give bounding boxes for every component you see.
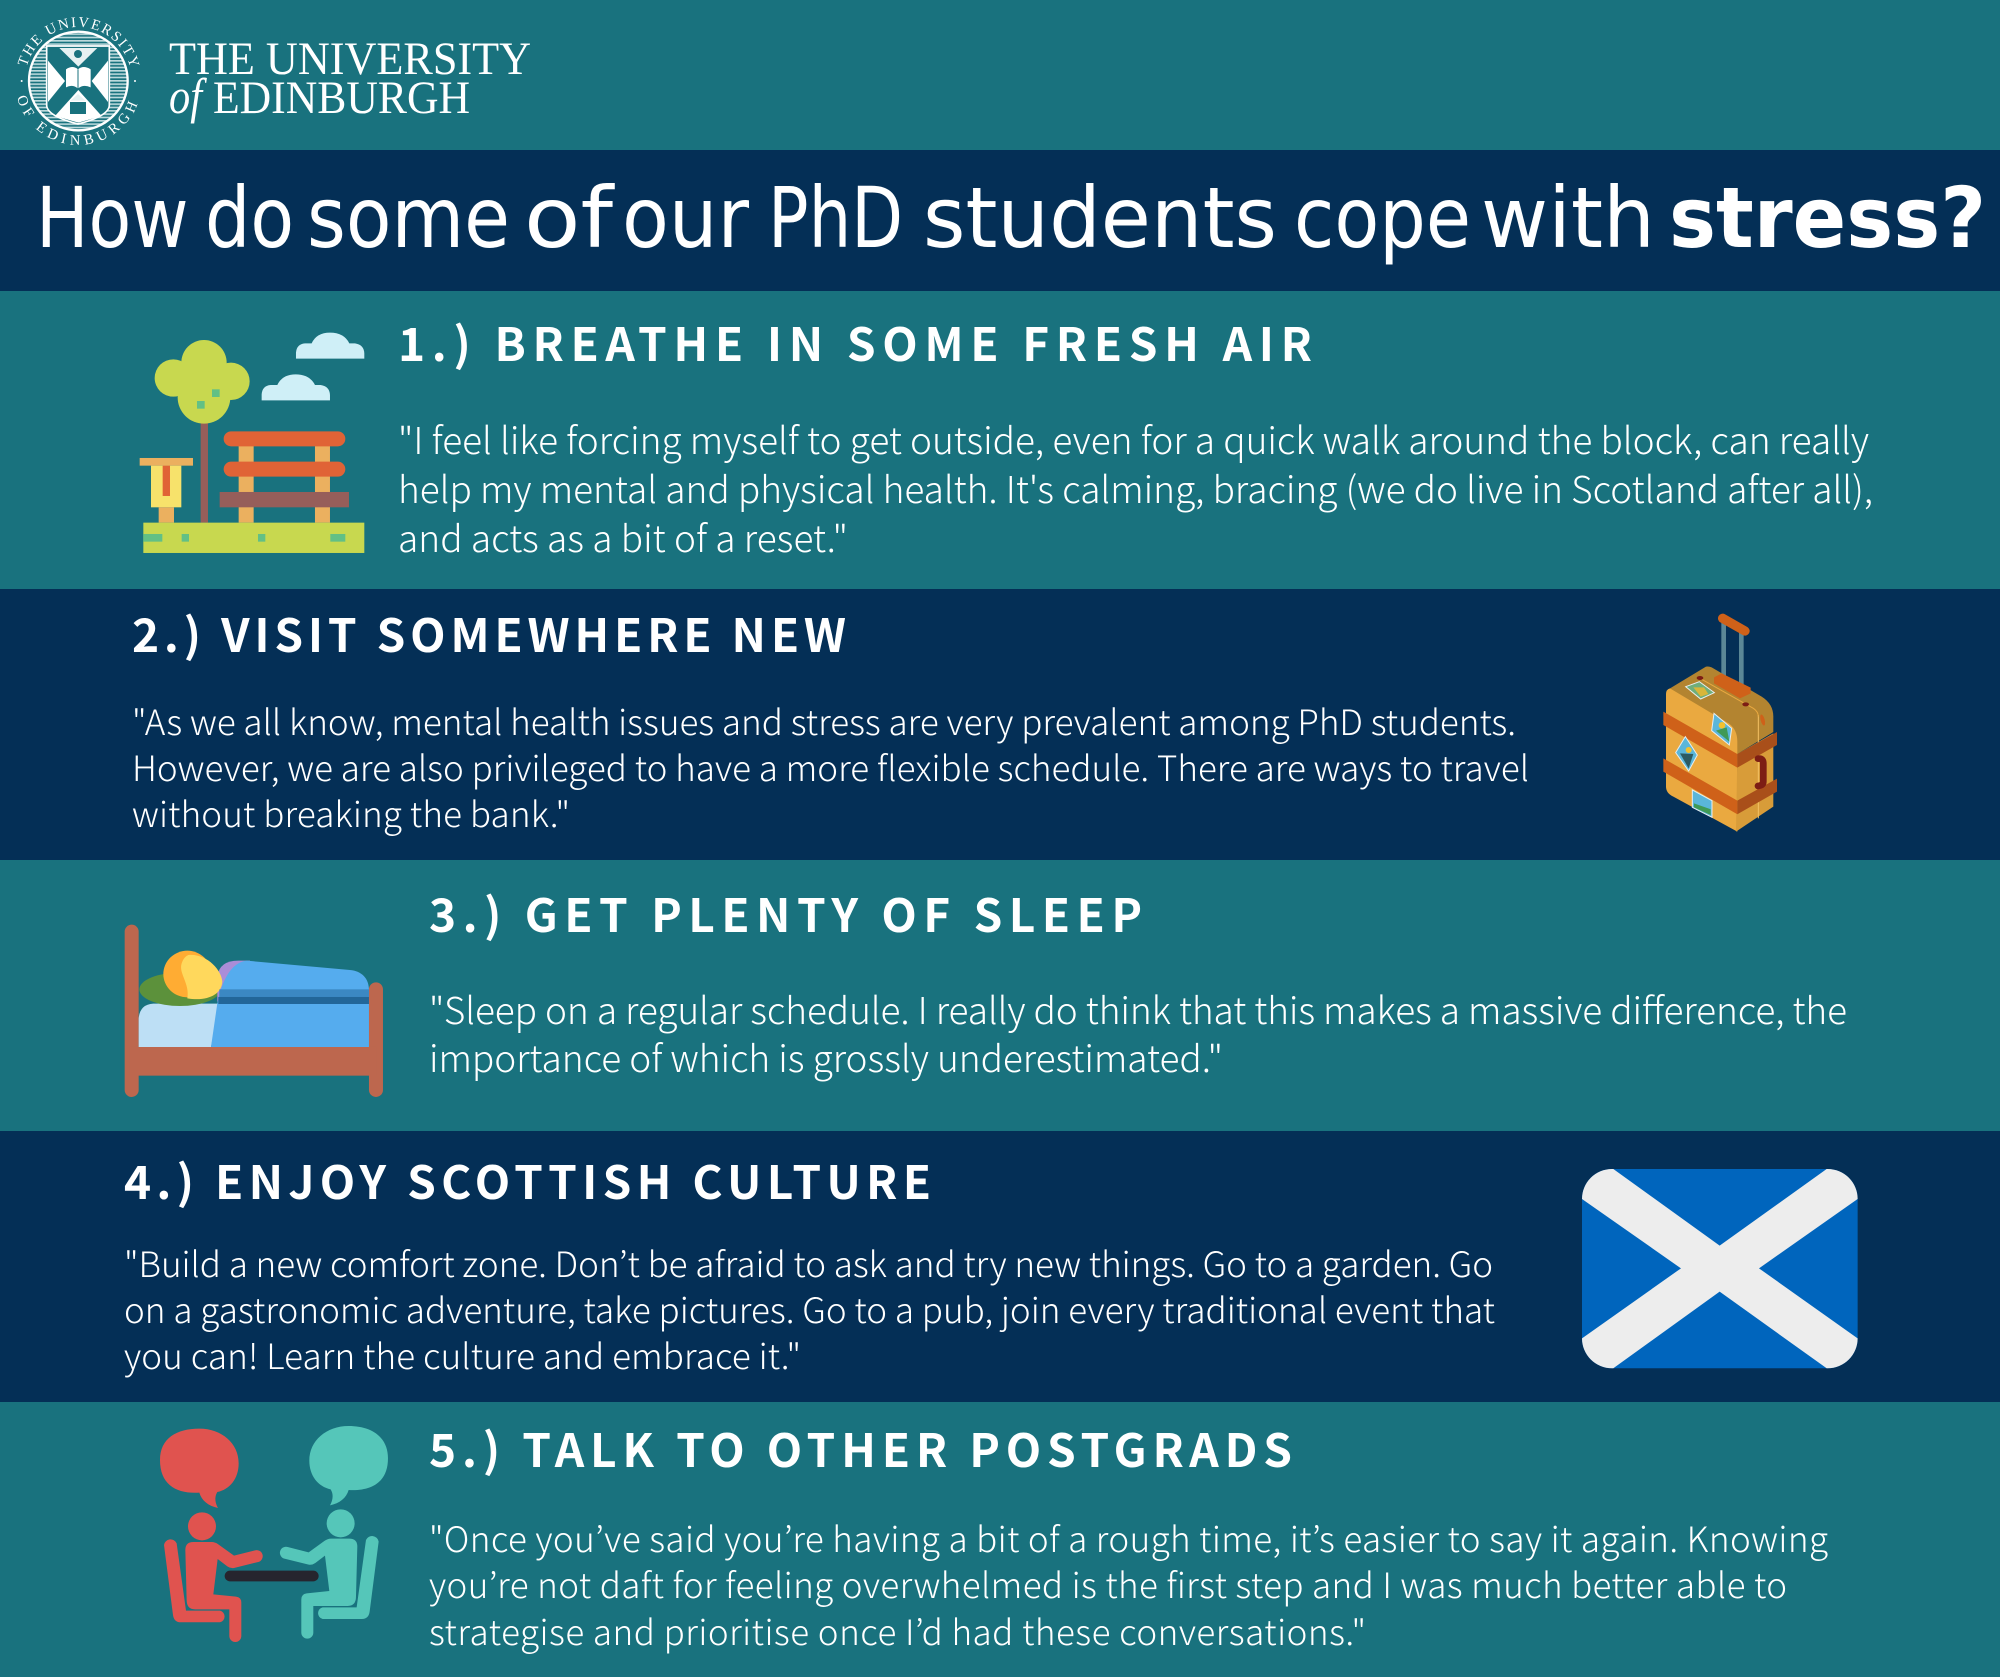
quote text: "Once you’ve said you’re having a bit of a rough time, it’s easier to say it again. Knowing <box>429 1512 1828 1563</box>
title: of <box>524 169 616 267</box>
title: some <box>307 169 510 267</box>
quote text: "Sleep on a regular schedule. I really do think that this makes a massive difference, the <box>429 981 1847 1035</box>
icon: Scottish flag <box>1582 1169 1858 1368</box>
icon: university seal: THE UNIVERSITY <box>18 17 140 66</box>
quote text: you can! Learn the culture and embrace it." <box>124 1329 801 1380</box>
panel: talk to other postgrads <box>0 1402 2000 1677</box>
icon: university seal <box>18 17 140 145</box>
panel: enjoy scottish culture <box>0 1131 2000 1402</box>
icon: suitcase <box>1663 618 1777 832</box>
icon: person sleeping in bed <box>125 925 383 1097</box>
panel: breathe in some fresh air <box>0 291 2000 589</box>
quote text: "As we all know, mental health issues and stress are very prevalent among PhD students. <box>132 695 1516 746</box>
heading: 3.) GET PLENTY OF SLEEP <box>429 880 1142 946</box>
quote text: "Build a new comfort zone. Don’t be afraid to ask and try new things. Go to a garden. Go <box>124 1237 1493 1288</box>
wordmark <box>169 33 531 124</box>
title: our <box>622 169 749 267</box>
wordmark: of <box>169 68 207 124</box>
icon: two people talking at a table <box>160 1426 388 1642</box>
quote text <box>398 411 1873 563</box>
title: students <box>923 169 1277 267</box>
quote text: and acts as a bit of a reset." <box>398 509 848 563</box>
quote text <box>429 1512 1828 1656</box>
icon: university seal: OF EDINBURGH <box>18 96 138 145</box>
title: How <box>36 169 188 267</box>
quote text <box>429 981 1847 1083</box>
quote text: importance of which is grossly underestimated." <box>429 1029 1223 1083</box>
wordmark: THE UNIVERSITY <box>169 33 531 85</box>
heading: 4.) ENJOY SCOTTISH CULTURE <box>124 1147 931 1213</box>
quote text: strategise and prioritise once I’d had these conversations." <box>429 1605 1366 1656</box>
header band <box>18 17 531 145</box>
quote text: help my mental and physical health. It's calming, bracing (we do live in Scotland after all), <box>398 460 1873 514</box>
quote text: "I feel like forcing myself to get outside, even for a quick walk around the block, can really <box>398 411 1869 465</box>
panel: get plenty of sleep <box>0 860 2000 1131</box>
quote text <box>124 1237 1495 1380</box>
quote text <box>132 695 1529 838</box>
icon: park bench, tree and clouds <box>140 333 364 553</box>
heading: 5.) TALK TO OTHER POSTGRADS <box>429 1415 1292 1481</box>
title: stress? <box>1669 169 1986 267</box>
title: cope <box>1294 169 1471 267</box>
heading: 1.) BREATHE IN SOME FRESH AIR <box>398 309 1312 375</box>
title: do <box>205 169 294 267</box>
wordmark: EDINBURGH <box>213 72 470 124</box>
heading: 2.) VISIT SOMEWHERE NEW <box>132 600 846 666</box>
quote text: on a gastronomic adventure, take pictures. Go to a pub, join every traditional event that <box>124 1283 1495 1334</box>
quote text: However, we are also privileged to have a more flexible schedule. There are ways to travel <box>132 741 1529 792</box>
title: PhD <box>768 169 903 267</box>
panel: visit somewhere new <box>0 589 2000 860</box>
logo: University of Edinburgh <box>18 17 531 145</box>
title: with <box>1481 169 1655 267</box>
quote text: you’re not daft for feeling overwhelmed is the first step and I was much better able to <box>429 1558 1787 1609</box>
title band <box>0 150 2000 291</box>
title <box>36 169 1986 267</box>
quote text: without breaking the bank." <box>132 787 570 838</box>
